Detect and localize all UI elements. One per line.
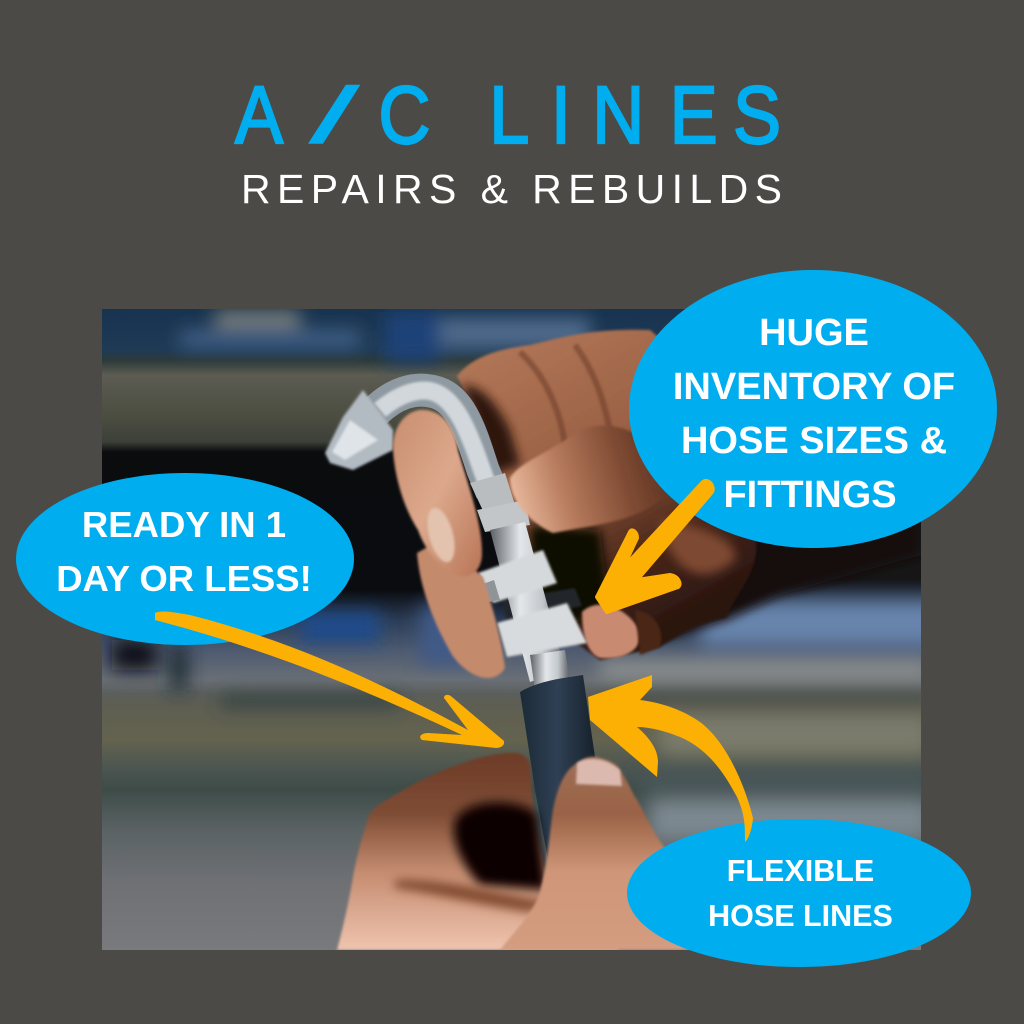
dark forearm	[666, 526, 918, 644]
photo: hands crimping a hose fitting	[102, 309, 940, 950]
callout: huge inventory: INVENTORY OF	[673, 366, 955, 408]
arrow: to hose from left callout	[155, 612, 504, 748]
title: /	[308, 70, 361, 160]
arrow: to fitting	[597, 481, 713, 612]
title: N	[592, 70, 644, 161]
flare nut	[325, 390, 393, 470]
callout: huge inventory: FITTINGS	[723, 474, 897, 516]
title: C	[378, 70, 431, 161]
lower hand	[337, 753, 720, 950]
title	[235, 70, 781, 161]
callout: huge inventory: HUGE	[759, 312, 869, 354]
upper hand	[457, 330, 756, 660]
lower curled fingers	[582, 605, 640, 658]
title: A	[235, 70, 284, 161]
title: S	[733, 70, 781, 161]
front fingers	[393, 410, 670, 678]
callout: ready in 1 day	[16, 473, 354, 645]
title: E	[670, 70, 718, 161]
callout: flexible hose lines: HOSE LINES	[708, 899, 893, 933]
crimp collars	[478, 550, 557, 603]
callout: huge inventory	[629, 270, 997, 548]
callout: huge inventory: HOSE SIZES &	[681, 420, 947, 462]
callout: ready in 1 day: DAY OR LESS!	[56, 558, 312, 599]
callout: ready in 1 day: READY IN 1	[82, 504, 286, 545]
callout: flexible hose lines	[627, 819, 971, 967]
callout: flexible hose lines: FLEXIBLE	[727, 854, 874, 888]
metal fitting	[325, 390, 587, 690]
arrow: curved to hose from bottom callout	[588, 675, 753, 842]
title: L	[489, 70, 529, 161]
subtitle: REPAIRS & REBUILDS	[241, 166, 782, 212]
title: I	[551, 70, 571, 161]
black hose	[520, 675, 595, 870]
